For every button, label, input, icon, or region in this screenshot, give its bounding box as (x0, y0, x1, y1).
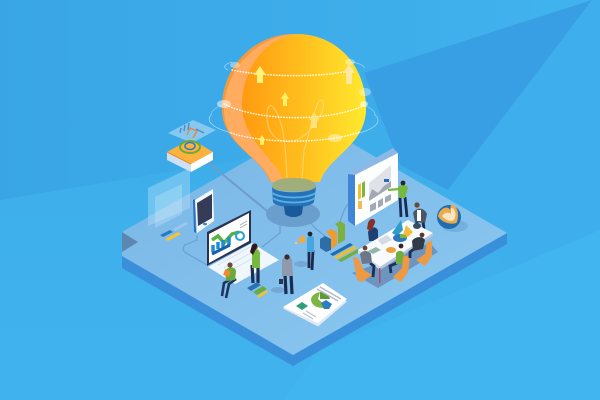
man in suit standing (413, 202, 427, 229)
man seated right with chair (410, 233, 432, 266)
report sheet with pie chart (283, 283, 347, 326)
platform notch (122, 232, 138, 252)
table charts (368, 220, 421, 254)
cables (183, 160, 350, 265)
icon: heart sphere (437, 205, 468, 232)
laptop (207, 210, 279, 284)
board chart (358, 165, 391, 212)
translucent floating panels (148, 168, 190, 228)
table top (358, 220, 433, 267)
pie chart (311, 292, 327, 308)
person: woman in green (250, 244, 260, 283)
person: seated with orange folder (222, 262, 236, 298)
man seated left with chair (353, 246, 374, 282)
presentation board (348, 148, 398, 226)
light bulb (209, 34, 378, 217)
woman seated behind table (367, 219, 378, 241)
color bars near laptop (247, 282, 268, 298)
laptop dashboard chart (212, 221, 247, 254)
person: man in gray with briefcase (271, 254, 293, 294)
platform (122, 122, 507, 366)
color bars near panels (160, 222, 188, 241)
bulb glass (222, 34, 366, 182)
filament (267, 100, 323, 180)
person: man in blue with clipboard (294, 232, 314, 270)
report legend lines (317, 287, 341, 301)
3D bar chart (320, 221, 345, 252)
screw base (272, 187, 316, 207)
icon: data cube (167, 120, 216, 172)
person: woman presenting at board (388, 181, 408, 217)
latitude rings (209, 62, 378, 141)
table leg (379, 268, 380, 283)
glowing nodes (217, 59, 371, 142)
floating glass chart (168, 120, 216, 143)
color strips by bar chart (330, 243, 361, 262)
outer ring back (211, 95, 375, 115)
woman seated front with chair (390, 244, 410, 282)
meeting table group (352, 202, 438, 288)
base glass collar (272, 178, 316, 192)
bulb base shadow (266, 201, 320, 227)
icon: tablet (193, 189, 214, 233)
upward arrows (254, 64, 355, 145)
